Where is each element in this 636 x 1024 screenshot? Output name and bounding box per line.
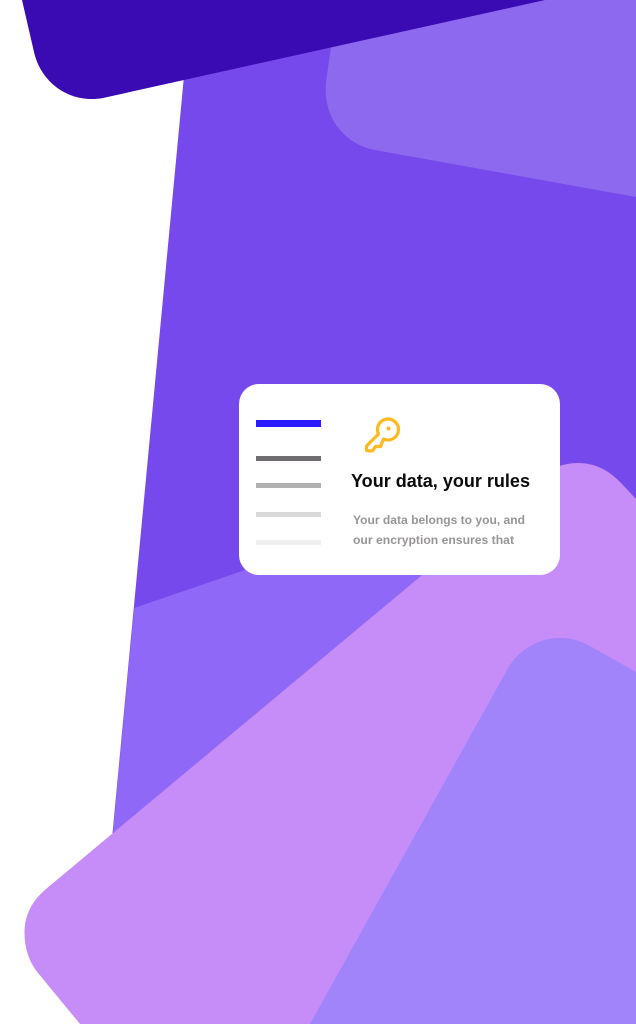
body text	[353, 513, 525, 547]
body text: Your data belongs to you, and	[353, 513, 525, 527]
sidebar lines	[256, 420, 321, 545]
panel: white card	[239, 384, 560, 575]
panel: medium violet lower shape	[113, 510, 500, 832]
panel: dark indigo top shape	[22, 0, 545, 99]
panel: pink shape	[24, 463, 636, 1024]
icon: key	[366, 419, 398, 451]
heading: Your data, your rules	[351, 470, 530, 491]
panel: periwinkle shape	[310, 638, 636, 1024]
panel: light violet top-right shape	[326, 0, 636, 197]
body text: our encryption ensures that	[353, 533, 514, 547]
